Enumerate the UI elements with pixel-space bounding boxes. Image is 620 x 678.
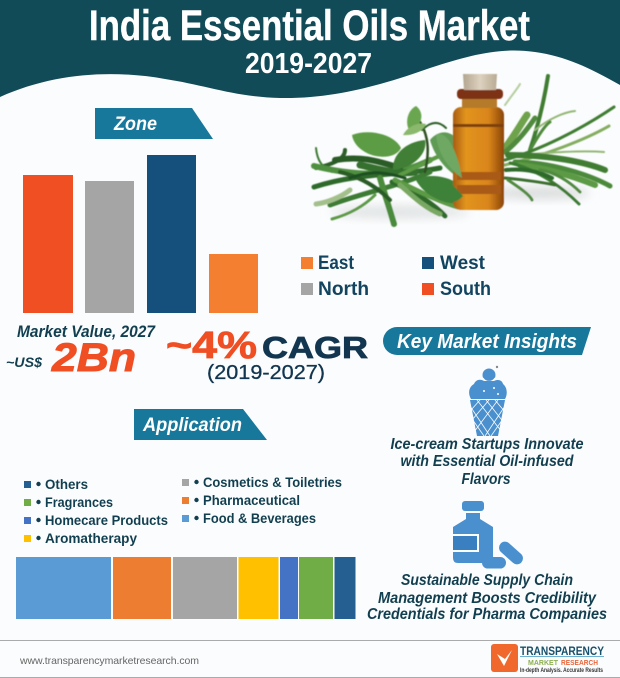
legend: application: Aromatherapy (45, 530, 137, 546)
legend: application (24, 474, 342, 546)
insight: pharma text (367, 572, 607, 623)
legend: zone: East (318, 253, 355, 274)
insight: pharma text: Management Boosts Credibility (378, 590, 597, 607)
legend: application: Food & Beverages (203, 510, 316, 526)
logo: RESEARCH (561, 658, 598, 667)
basil leaves (352, 132, 401, 157)
stat: CAGR: (2019-2027) (207, 362, 325, 384)
bar: west (147, 155, 196, 313)
insight: ice-cream text: Ice-cream Startups Innovate (390, 436, 584, 453)
insight: pharma text: Sustainable Supply Chain (401, 572, 573, 589)
icon: medicine bottle and pills (453, 501, 525, 568)
stat: market value: Market Value, 2027 (17, 322, 156, 341)
legend: application: Fragrances (45, 494, 113, 510)
zone heading: Zone (113, 114, 157, 135)
legend: application: Pharmaceutical (203, 492, 300, 508)
insight: pharma text: Credentials for Pharma Companies (367, 606, 607, 623)
bar chart: zone (23, 155, 258, 313)
legend: zone: West (440, 253, 486, 274)
stat: CAGR: ~4% (166, 325, 257, 367)
image: essential oil bottle and herbs (314, 74, 614, 224)
logo: In-depth Analysis. Accurate Results (520, 668, 604, 674)
key market insights heading: Key Market Insights (397, 331, 577, 353)
insight: ice-cream text: with Essential Oil-infused (400, 453, 574, 470)
application heading (134, 409, 267, 440)
title: India Essential Oils Market (89, 2, 530, 50)
subtitle: years: 2019-2027 (245, 48, 372, 80)
legend: application: Cosmetics & Toiletries (203, 474, 342, 490)
stacked bar: application (16, 557, 356, 619)
left rosemary sprig (314, 122, 458, 224)
right rosemary sprig (505, 76, 614, 204)
stat: CAGR: CAGR (262, 330, 368, 365)
legend: zone: South (440, 279, 491, 300)
logo: MARKET (528, 658, 558, 667)
legend: application: Homecare Products (45, 512, 168, 528)
insight: ice-cream text (390, 436, 584, 488)
logo: TRANSPARENCY (520, 644, 604, 658)
footer (0, 640, 620, 678)
stat: CAGR (166, 325, 368, 384)
logo (491, 644, 604, 674)
stat: market value (6, 322, 156, 380)
legend: application: Others (45, 476, 88, 492)
bar: north (85, 181, 134, 313)
stat: market value: ~US$ (6, 354, 42, 370)
insight: ice-cream text: Flavors (462, 471, 511, 488)
bar: east (209, 254, 258, 313)
legend: zone: North (318, 279, 369, 300)
icon: ice cream (469, 366, 507, 436)
bar: south (23, 175, 73, 313)
legend: zone (301, 253, 491, 300)
bottle (453, 107, 504, 210)
application heading: Application (142, 415, 242, 436)
stat: market value: 2Bn (51, 336, 136, 380)
website url: www.transparencymarketresearch.com (19, 655, 199, 667)
zone heading (95, 108, 213, 139)
header band (0, 0, 620, 98)
